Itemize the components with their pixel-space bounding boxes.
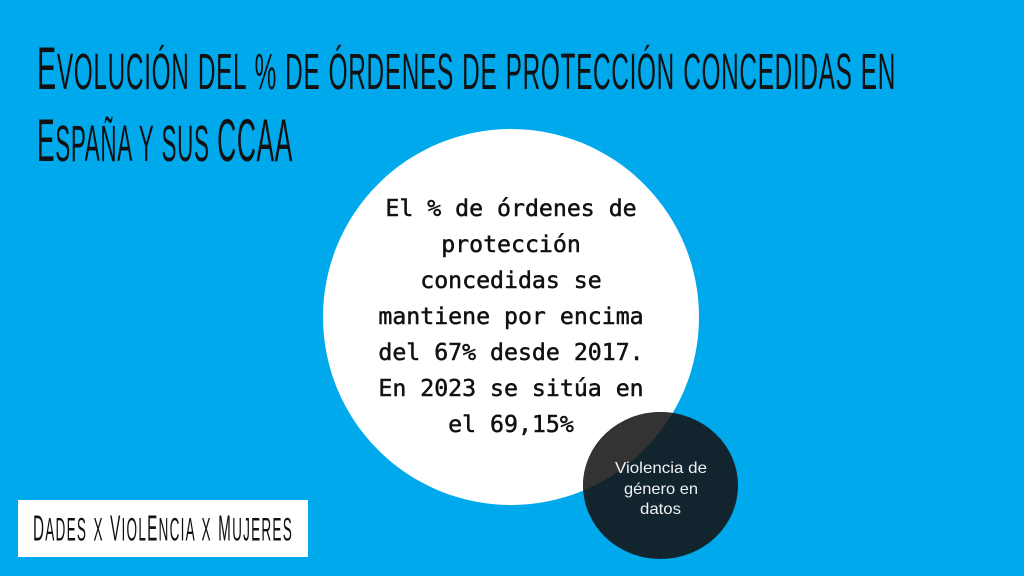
- title: ESPAÑA Y SUS CCAA: [37, 107, 293, 174]
- callout text: concedidas se: [420, 267, 602, 294]
- callout text: del 67% desde 2017.: [378, 339, 644, 366]
- badge text: datos: [640, 501, 681, 518]
- callout text: En 2023 se sitúa en: [378, 375, 644, 402]
- callout text: mantiene por encima: [378, 303, 644, 330]
- callout text: protección: [441, 231, 581, 258]
- callout text: El % de órdenes de: [385, 195, 637, 222]
- white circle callout: [323, 129, 699, 505]
- dark circle badge: [583, 412, 738, 559]
- badge text: [615, 460, 707, 518]
- badge text: género en: [624, 481, 698, 498]
- callout text: [378, 195, 644, 438]
- callout text: el 69,15%: [448, 411, 574, 438]
- brand label: DADES X VIOLENCIA X MUJERES: [33, 508, 293, 548]
- badge text: Violencia de: [615, 460, 707, 477]
- brand label: [18, 500, 308, 557]
- title: [37, 35, 896, 174]
